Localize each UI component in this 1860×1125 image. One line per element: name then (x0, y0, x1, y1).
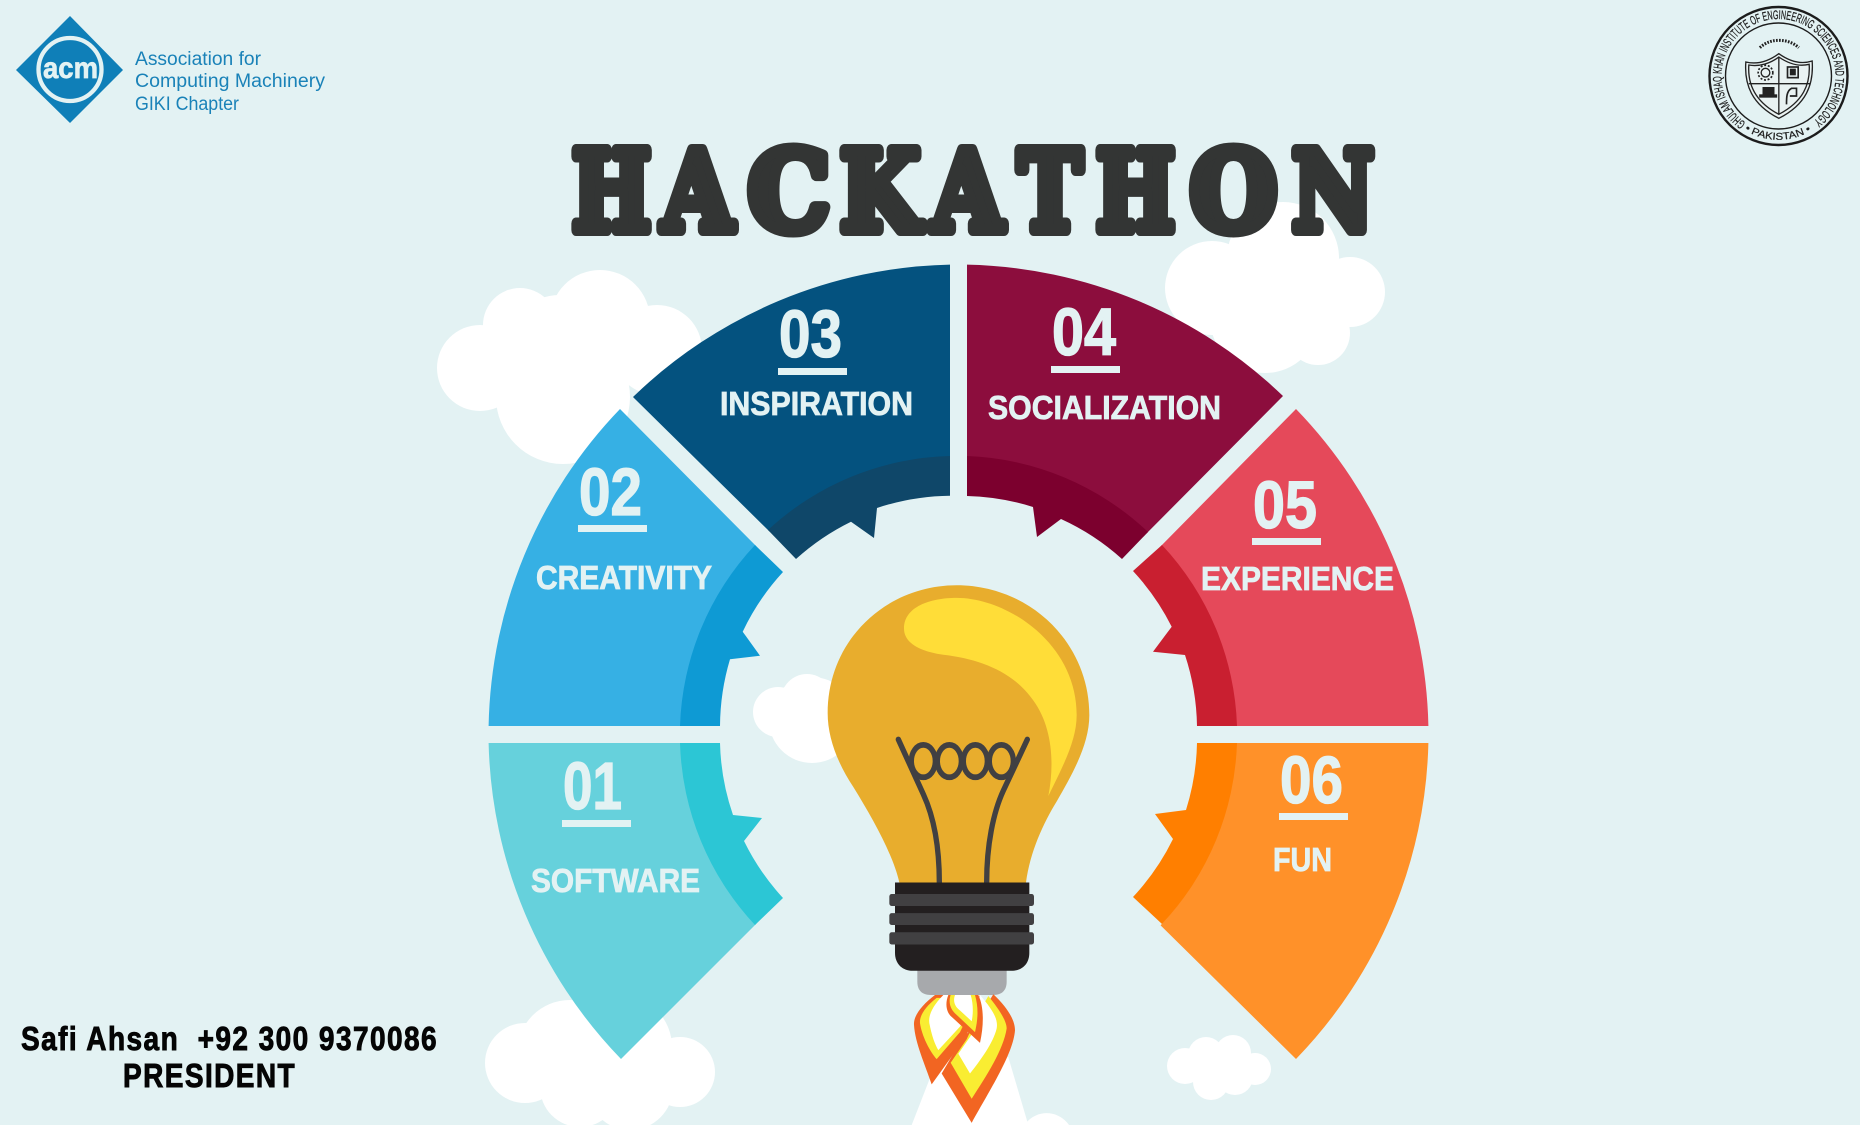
panel: 05 experience: 05 (1253, 468, 1317, 543)
title: A (661, 127, 734, 256)
grey nozzle (917, 967, 1007, 995)
panel: 05 experience (1133, 409, 1428, 726)
panel: 04 socialization (967, 265, 1283, 559)
flames (914, 994, 1015, 1123)
panel: 01 software (489, 743, 783, 1059)
title: K (840, 127, 923, 256)
title: C (748, 127, 830, 256)
exhaust plume (912, 1057, 1075, 1125)
title: H (1096, 127, 1175, 256)
text: organisation name (135, 49, 326, 115)
panel: 02 creativity: CREATIVITY (536, 560, 712, 597)
panel: 01 software: SOFTWARE (531, 863, 700, 900)
filament (898, 739, 1027, 883)
title: H (572, 127, 651, 256)
panel: 03 inspiration: INSPIRATION (720, 386, 913, 423)
icon: ACM diamond (16, 16, 123, 123)
cloud: behind bulb (753, 674, 855, 763)
panel: 04 socialization: SOCIALIZATION (988, 390, 1221, 427)
icon: ACM diamond: acm (43, 52, 98, 85)
text: organisation name: Association for (135, 49, 262, 70)
contact block: PRESIDENT (123, 1058, 295, 1095)
icon: shield (1746, 40, 1812, 118)
cloud: top right (1165, 202, 1385, 373)
panel: 03 inspiration (633, 265, 950, 559)
contact block: Safi Ahsan +92 300 9370086 (21, 1021, 437, 1058)
text: seal ring: GHULAM ISHAQ KHAN INSTITUTE OF ENGINEERING SCIENCES AND TECHNOLOGY (1712, 10, 1844, 128)
panel: 05 experience: EXPERIENCE (1201, 561, 1394, 598)
bulb highlight (904, 598, 1077, 796)
text: organisation name: Computing Machinery (135, 71, 326, 92)
screw base (889, 883, 1034, 971)
cloud: bottom right (1167, 1035, 1271, 1100)
icon: light bulb rocket (828, 585, 1089, 1125)
bulb glass (828, 585, 1089, 883)
title: N (1292, 127, 1374, 256)
panel: 06 fun (1133, 743, 1428, 1059)
title: T (1018, 127, 1082, 256)
panel: 01 software: 01 (563, 749, 622, 824)
contact block (21, 1021, 437, 1095)
panel: 02 creativity: 02 (579, 455, 642, 530)
logo: GIK Institute seal (1708, 6, 1849, 146)
panel: 02 creativity (489, 409, 783, 726)
panel: 04 socialization: 04 (1052, 295, 1116, 370)
text: seal Pakistan: • PAKISTAN • (1746, 126, 1810, 140)
panel: 03 inspiration: 03 (779, 297, 842, 372)
title: O (1190, 127, 1277, 256)
panel: 06 fun: FUN (1273, 842, 1332, 879)
logo: ACM GIKI Chapter (16, 16, 326, 123)
text: organisation name: GIKI Chapter (135, 94, 240, 115)
title: A (931, 127, 1004, 256)
panel: 06 fun: 06 (1280, 743, 1343, 818)
title (572, 127, 1374, 256)
cloud: top left (437, 270, 702, 464)
cloud: bottom left (485, 995, 715, 1125)
